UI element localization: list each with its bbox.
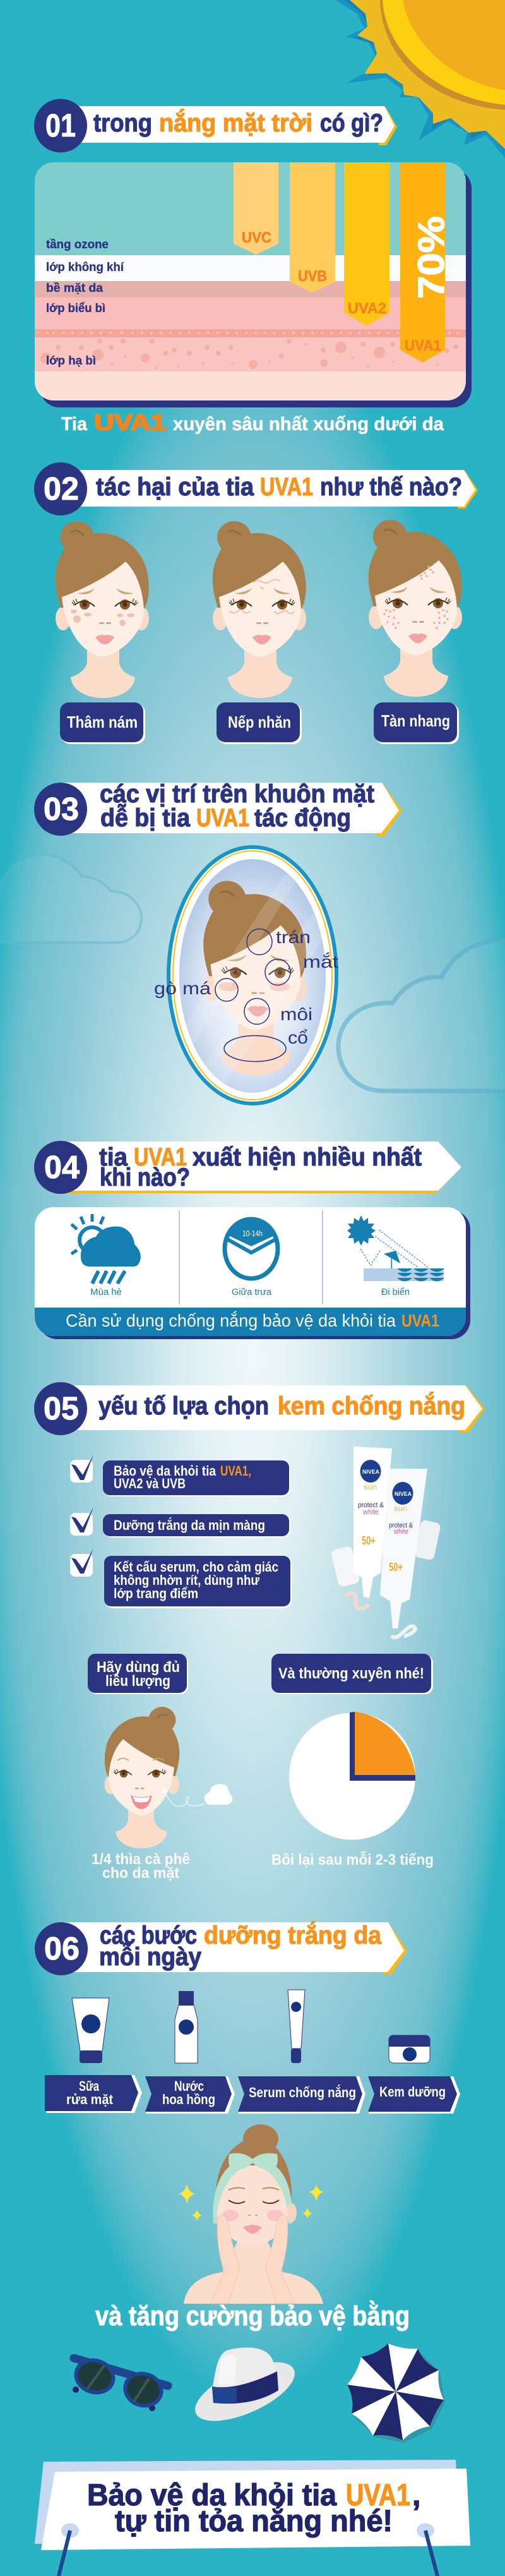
caption: UVA1 penetrates deepest: xuyên sâu nhất xuống dưới da <box>173 414 444 435</box>
section 01 heading <box>34 99 397 153</box>
layer labels: lớp không khí <box>46 261 124 274</box>
section 02 heading <box>34 462 478 515</box>
closing message <box>87 2479 420 2538</box>
layer labels <box>46 238 124 368</box>
step 1 arrow: Sữa <box>79 2078 100 2094</box>
layer labels: bề mặt da <box>46 282 103 295</box>
rear tube: 50+ <box>389 1561 403 1574</box>
checklist item 1: UVA2 và UVB <box>114 1476 186 1491</box>
rear tube: protect & <box>389 1522 413 1529</box>
label: Nếp nhăn: Nếp nhăn <box>228 713 291 731</box>
closing message: tự tin tỏa nắng nhé! <box>115 2503 393 2538</box>
zone labels: trán <box>276 927 311 947</box>
checklist item 3: Kết cấu serum, cho cảm giác <box>114 1559 278 1575</box>
checklist item 3 <box>70 1548 292 1608</box>
face: freckles <box>369 520 462 697</box>
UVA1 ray <box>400 162 452 363</box>
callout: use enough amount <box>88 1654 188 1694</box>
section 05 heading <box>34 1382 485 1435</box>
footer note: UVA1 <box>401 1311 439 1330</box>
section 02 heading: UVA1 <box>260 473 313 501</box>
icon: sunglasses <box>69 2353 168 2413</box>
UVC ray <box>234 162 278 255</box>
section 03 heading <box>34 780 402 836</box>
front tube <box>354 1447 392 1598</box>
woman with glowing skin <box>179 2124 324 2304</box>
zone labels: mắt <box>303 952 338 972</box>
section 01 heading: 01 <box>45 107 76 143</box>
zone labels: cổ <box>288 1028 308 1047</box>
checklist item 3: lớp trang điểm <box>114 1586 198 1601</box>
rear tube: white <box>393 1528 408 1536</box>
layer labels: lớp biểu bì <box>46 302 105 315</box>
step 3 arrow <box>238 2076 365 2114</box>
callout: apply regularly: Và thường xuyên nhé! <box>278 1665 424 1682</box>
step 2 arrow: hoa hồng <box>162 2091 215 2107</box>
panel: when UVA1 peaks <box>35 1207 470 1339</box>
section 04 heading: UVA1 <box>134 1143 187 1171</box>
step 1 arrow <box>45 2075 142 2113</box>
zone labels: gò má <box>154 978 211 998</box>
zone circles <box>215 929 290 1061</box>
section 05 heading: yếu tố lựa chọn <box>98 1392 269 1420</box>
checklist item 1: UVA1, <box>220 1463 251 1479</box>
section 06 heading: dưỡng trắng da <box>204 1920 382 1949</box>
icon: sun hat <box>187 2347 302 2433</box>
callout: use enough amount: Hãy dùng đủ <box>97 1659 180 1676</box>
section 02 heading: như thế nào? <box>320 473 462 501</box>
zone labels: môi <box>280 1004 312 1024</box>
section 01 heading: nắng mặt trời <box>159 108 312 137</box>
section 04 heading: khi nào? <box>100 1164 190 1191</box>
UVC ray: UVC <box>242 229 271 246</box>
checklist item 3: không nhờn rít, dùng như <box>114 1572 259 1588</box>
UVA1 ray: 70% <box>411 216 452 299</box>
section 01 heading: có gì? <box>320 109 383 137</box>
step 2 arrow <box>145 2076 235 2114</box>
section 04 heading <box>34 1141 461 1194</box>
section 03 heading: UVA1 <box>196 804 249 832</box>
UVA2 ray <box>344 162 389 326</box>
icon: cleanser tube <box>72 1998 109 2063</box>
icon: midday clock: Giữa trưa <box>232 1287 272 1297</box>
section 03 heading: 03 <box>44 791 79 827</box>
section 02 heading: 02 <box>44 471 79 507</box>
section 06 heading: 06 <box>44 1930 80 1966</box>
decorative cloud right <box>338 941 505 1091</box>
chart: clock pie reapply <box>289 1712 415 1839</box>
closing message: Bảo vệ da khỏi tia <box>87 2479 336 2512</box>
caption: UVA1 penetrates deepest: UVA1 <box>94 409 166 435</box>
section 06 heading: mỗi ngày <box>99 1942 202 1971</box>
section 03 heading: tác động <box>254 804 351 832</box>
label: Nếp nhăn <box>217 702 302 744</box>
sun <box>335 0 505 158</box>
closing message: UVA1 <box>346 2479 410 2512</box>
decorative cloud left <box>0 855 141 942</box>
label: Thâm nám: Thâm nám <box>67 713 138 731</box>
section 04 heading: tia <box>99 1143 128 1171</box>
panel: UV skin layers diagram <box>35 162 472 407</box>
icon: midday clock: 10-14h <box>242 1229 263 1238</box>
icon: serum tube <box>288 1990 305 2063</box>
section 03 heading: các vị trí trên khuôn mặt <box>100 780 374 808</box>
UVA2 ray: UVA2 <box>348 300 386 317</box>
callout: use enough amount: liều lượng <box>105 1673 170 1690</box>
layer labels: lớp hạ bì <box>46 354 96 368</box>
section 05 heading: 05 <box>44 1390 79 1426</box>
heading: extra protection: và tăng cường bảo vệ bằng <box>95 2300 410 2332</box>
layer labels: tầng ozone <box>46 238 109 251</box>
checklist item 2: Dưỡng trắng da mịn màng <box>114 1517 265 1533</box>
UVA1 ray: UVA1 <box>405 337 441 354</box>
UVB ray <box>290 162 335 292</box>
rear tube <box>380 1469 427 1628</box>
callout: apply regularly <box>271 1654 433 1694</box>
front tube: protect & <box>358 1502 384 1509</box>
front tube: NIVEA <box>362 1469 379 1475</box>
checklist item 1 <box>70 1455 290 1496</box>
sparkles <box>179 2184 324 2222</box>
section 03 heading: dễ bị tia <box>100 803 191 832</box>
rear tube: sun <box>394 1504 407 1513</box>
rear tube: NIVEA <box>395 1491 412 1497</box>
footer note: Cần sử dụng chống nắng bảo vệ da khỏi tia <box>66 1311 396 1330</box>
section 06 heading <box>35 1920 407 1975</box>
section 01 heading: trong <box>93 109 152 137</box>
caption: quarter teaspoon: 1/4 thìa cà phê <box>92 1851 190 1868</box>
checklist item 1: Bảo vệ da khỏi tia <box>114 1463 217 1479</box>
label: Tàn nhang: Tàn nhang <box>381 711 450 730</box>
icon: beach <box>347 1215 444 1297</box>
caption: quarter teaspoon <box>92 1851 190 1882</box>
checklist item 2 <box>70 1507 290 1538</box>
closing message: , <box>412 2479 420 2512</box>
icon: toner bottle <box>175 1991 198 2063</box>
front tube: sun <box>364 1483 377 1491</box>
icon: umbrella <box>347 2344 445 2443</box>
label: Thâm nám <box>60 702 145 744</box>
face: dark spots <box>56 521 149 698</box>
icon: midday clock <box>225 1219 278 1297</box>
product: sunscreen tubes <box>330 1447 441 1637</box>
icon: summer weather <box>71 1214 141 1297</box>
section 06 heading: các bước <box>100 1922 197 1949</box>
zone labels <box>154 927 338 1047</box>
mirror with face zones <box>154 847 338 1104</box>
step 3 arrow: Serum chống nắng <box>249 2085 356 2100</box>
section 04 heading: 04 <box>44 1149 80 1185</box>
UVB ray: UVB <box>298 268 327 285</box>
section 02 heading: tác hại của tia <box>96 473 254 501</box>
step 2 arrow: Nước <box>174 2078 204 2094</box>
caption: reapply every 2-3 hours: Bôi lại sau mỗi 2-3 tiếng <box>271 1851 434 1869</box>
face: wrinkles <box>213 521 306 698</box>
caption: UVA1 penetrates deepest: Tia <box>61 414 87 435</box>
front tube: 50+ <box>362 1534 376 1547</box>
icon: summer weather: Mùa hè <box>90 1287 122 1297</box>
closing sign <box>35 2460 470 2576</box>
tube caps and swatches <box>330 1519 441 1637</box>
step 4 arrow <box>368 2076 460 2114</box>
front tube: white <box>362 1508 379 1516</box>
caption: UVA1 penetrates deepest <box>61 409 444 435</box>
icon: beach: Đi biển <box>381 1287 410 1297</box>
caption: quarter teaspoon: cho da mặt <box>102 1865 179 1882</box>
section 04 heading: xuất hiện nhiều nhất <box>193 1143 422 1171</box>
label: Tàn nhang <box>374 702 459 744</box>
step 4 arrow: Kem dưỡng <box>379 2084 446 2100</box>
section 05 heading: kem chống nắng <box>278 1391 465 1420</box>
smiling face with cream <box>105 1707 232 1848</box>
icon: cream jar <box>389 2035 430 2063</box>
step 1 arrow: rửa mặt <box>66 2091 114 2107</box>
